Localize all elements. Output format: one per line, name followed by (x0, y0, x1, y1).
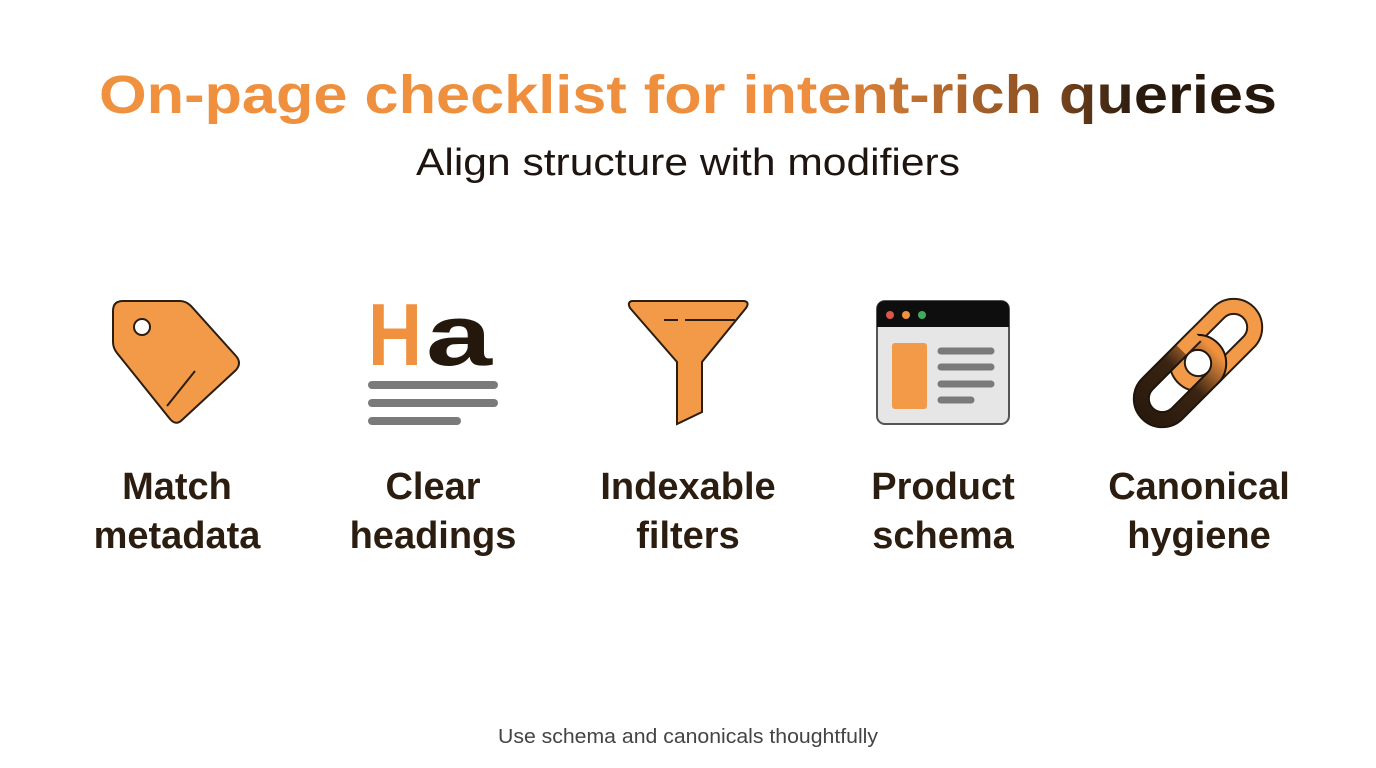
icon: headings: a (426, 288, 494, 384)
icon: headings: H (368, 285, 422, 384)
label: metadata (94, 515, 261, 557)
item: product schema (871, 301, 1015, 557)
label: Product (871, 466, 1015, 508)
label: hygiene (1127, 515, 1271, 557)
item: canonical hygiene (1108, 298, 1290, 557)
label: filters (636, 515, 740, 557)
label: Match (122, 466, 232, 508)
icon: chain link (1133, 298, 1263, 428)
icon: funnel (629, 301, 748, 424)
item: match metadata (94, 301, 261, 557)
label: headings (350, 515, 516, 557)
item: clear headings (350, 285, 516, 557)
title: On-page checklist for intent-rich queries (99, 65, 1277, 125)
icon: tag (113, 301, 239, 423)
subtitle: Align structure with modifiers (416, 142, 960, 184)
icon: headings (368, 285, 494, 421)
footer note: Use schema and canonicals thoughtfully (498, 726, 878, 748)
label: Canonical (1108, 466, 1290, 508)
label: schema (872, 515, 1015, 557)
label: Indexable (600, 466, 776, 508)
item: indexable filters (600, 301, 776, 557)
icon: browser (877, 301, 1009, 424)
label: Clear (385, 466, 481, 508)
